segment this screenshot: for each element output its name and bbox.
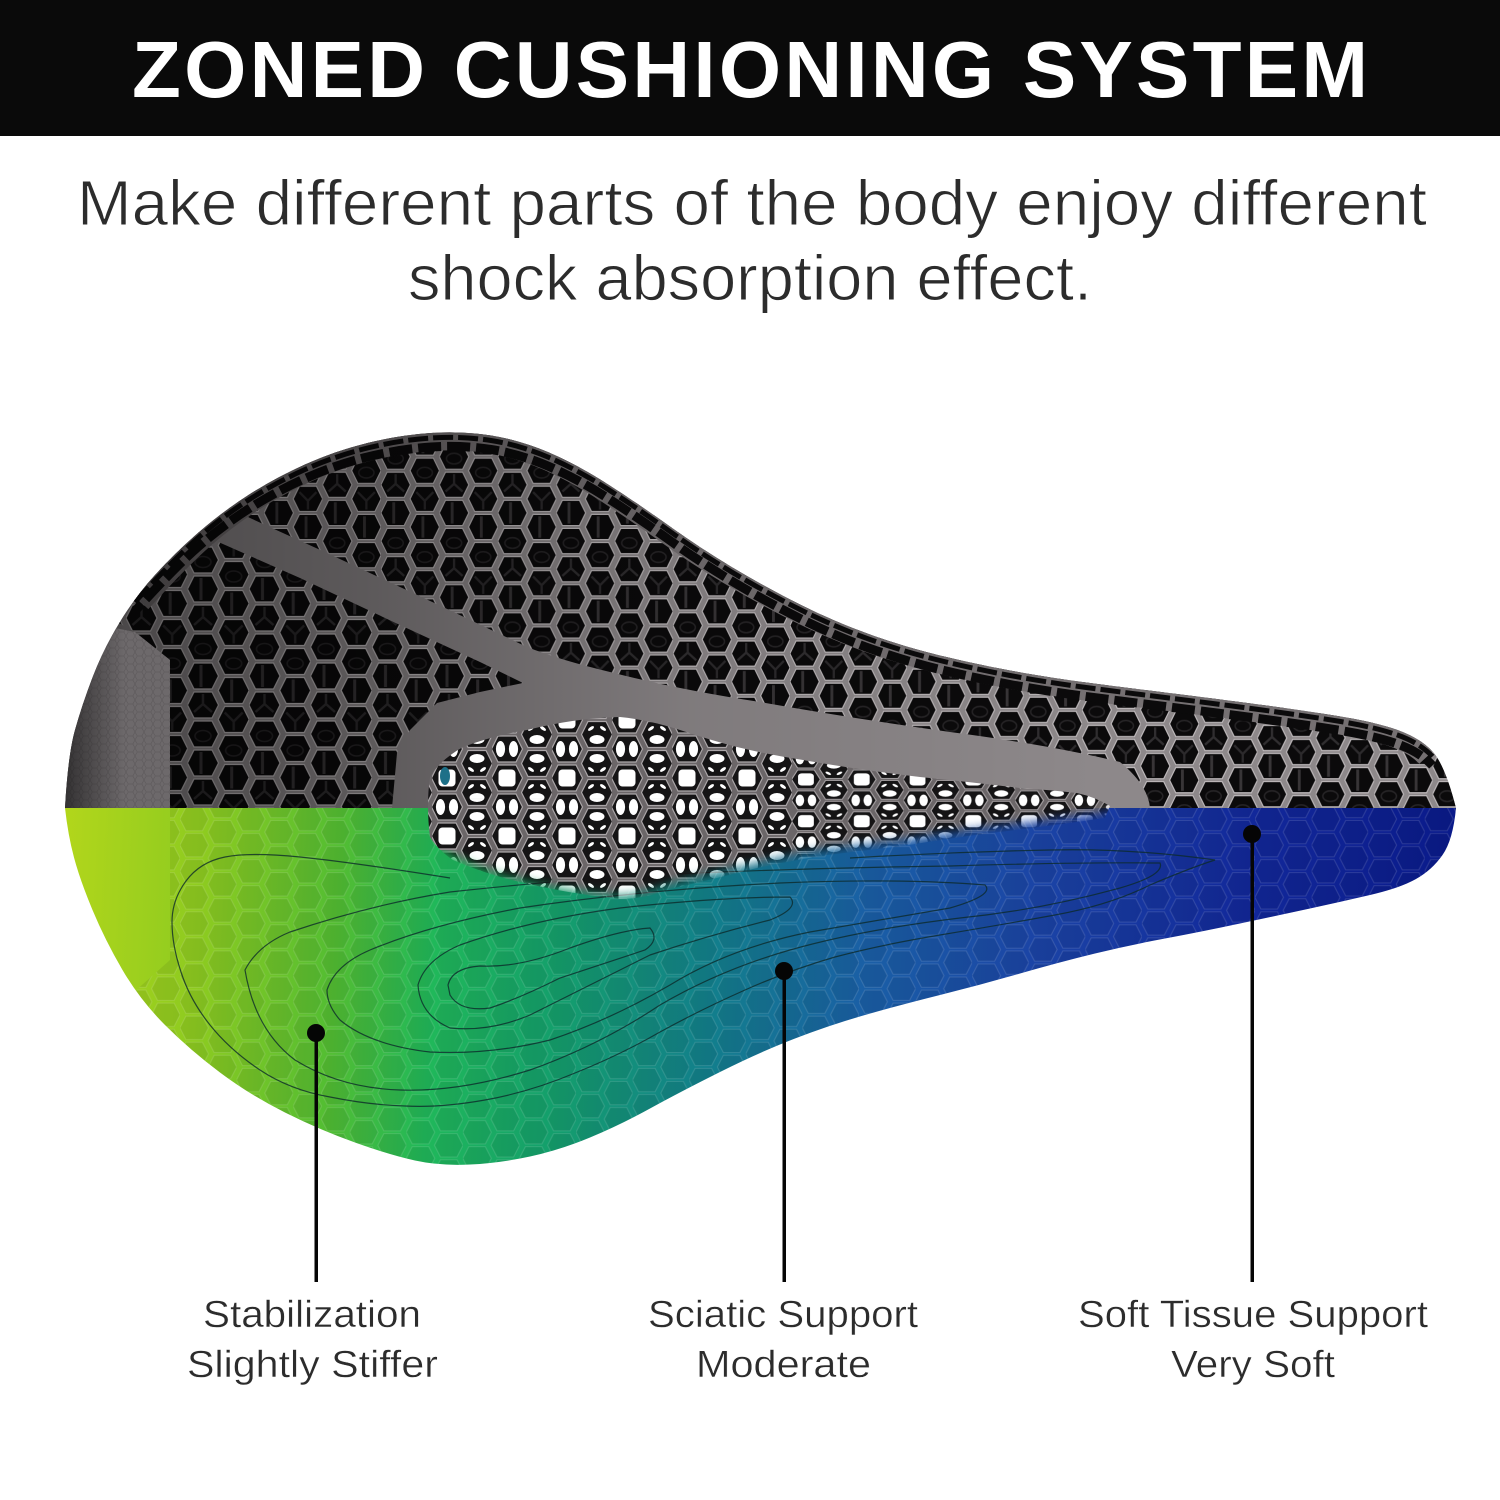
- leader: stabilization: [307, 1024, 325, 1282]
- saddle top half: black honeycomb: [60, 420, 1500, 820]
- leader: sciatic support: [775, 962, 793, 1282]
- label: stabilization, slightly stiffer: Stabilization: [203, 1294, 421, 1336]
- label: soft tissue support, very soft: Soft Tissue Support: [1078, 1294, 1428, 1336]
- central cut-out: open honeycomb with white holes: [428, 717, 1110, 899]
- honeycomb: rear wing: [119, 532, 523, 808]
- subtitle text: [77, 167, 1427, 314]
- label: stabilization, slightly stiffer: Slightly Stiffer: [187, 1344, 438, 1386]
- label: sciatic support, moderate: Sciatic Support: [648, 1294, 918, 1336]
- label: sciatic support, moderate: Moderate: [696, 1344, 871, 1386]
- colored lower half: green to blue zones: [65, 808, 1456, 1165]
- subtitle text: Make different parts of the body enjoy different: [77, 167, 1427, 239]
- label: sciatic support, moderate: [648, 1294, 918, 1386]
- faint honeycomb on color: [136, 808, 1456, 1165]
- rear left smooth patch: [60, 625, 170, 808]
- honeycomb: upper wing and nose: [228, 432, 1456, 808]
- leader: soft tissue support: [1243, 825, 1261, 1282]
- heading: zoned cushioning system: ZONED CUSHIONING SYSTEM: [132, 25, 1368, 114]
- flattened cells along the top edge: [135, 432, 1432, 766]
- title banner: [0, 0, 1500, 136]
- label: soft tissue support, very soft: Very Soft: [1171, 1344, 1335, 1386]
- subtitle text: shock absorption effect.: [408, 242, 1092, 314]
- saddle illustration: [65, 432, 1456, 1165]
- teal blob in first cell: [440, 767, 450, 785]
- darkening shade: [65, 432, 916, 808]
- label: soft tissue support, very soft: [1078, 1294, 1428, 1386]
- contour lines: [172, 850, 1215, 1106]
- label: stabilization, slightly stiffer: [187, 1294, 438, 1386]
